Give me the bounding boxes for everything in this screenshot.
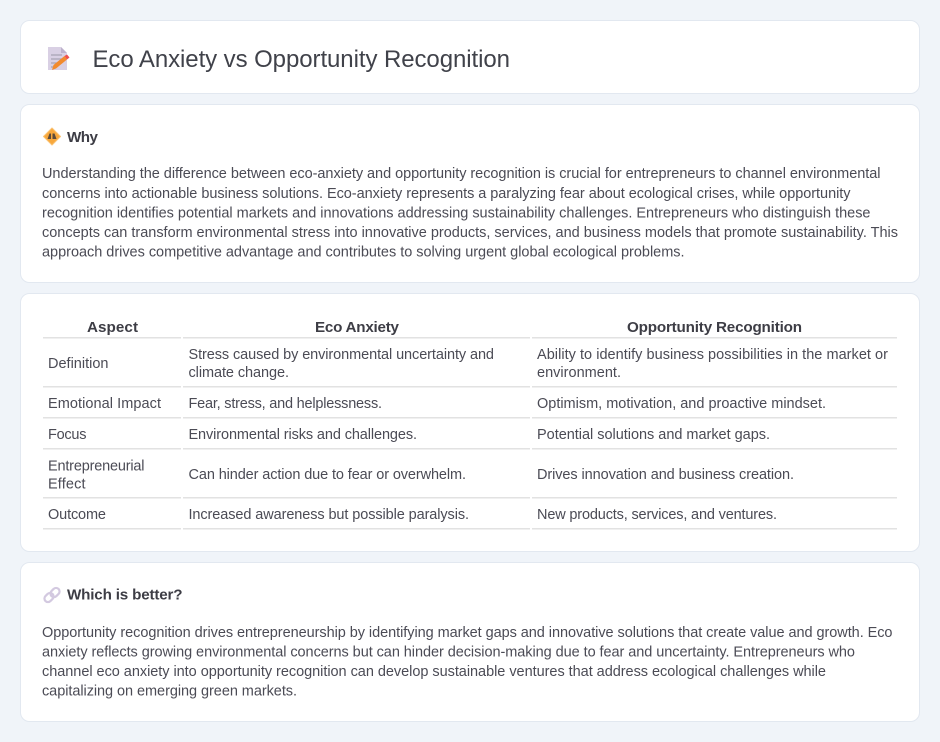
- row: outcome: Outcome: [48, 507, 106, 523]
- row: definition: Definition: [48, 356, 108, 372]
- row: definition: [48, 347, 888, 381]
- row: definition: Stress caused by environmental uncertainty and: [188, 347, 494, 363]
- row: emotional impact: Optimism, motivation, and proactive mindset.: [537, 396, 826, 412]
- row: emotional impact: Fear, stress, and helplessness.: [188, 396, 382, 412]
- row: emotional impact: Emotional Impact: [48, 396, 161, 412]
- panel: why: [20, 104, 920, 282]
- text block: why paragraph: recognition identifies potential markets and innovations addressing sustainability challenges. Entrepreneurs who distinguish these: [42, 206, 870, 222]
- text block: why paragraph: concerns into actionable business solutions. Eco-anxiety represents a paralyzing fear about ecological crises, while opportunity: [42, 186, 851, 202]
- text block: which is better paragraph: channel eco anxiety into opportunity recognition can develop sustainable ventures that address ecological challenges while: [42, 664, 826, 680]
- row: entrepreneurial effect: Can hinder action due to fear or overwhelm.: [188, 467, 466, 483]
- row: definition: Ability to identify business possibilities in the market or: [537, 347, 888, 363]
- table rules: [43, 337, 897, 530]
- panel: which is better: [20, 562, 920, 722]
- row: focus: Environmental risks and challenges.: [188, 427, 417, 443]
- icon: document with pencil: [48, 47, 70, 70]
- row: entrepreneurial effect: Entrepreneurial: [48, 458, 144, 474]
- text block: which is better paragraph: capitalizing on emerging green markets.: [42, 684, 297, 700]
- row: focus: Focus: [48, 427, 86, 443]
- title: Eco Anxiety vs Opportunity Recognition: [92, 46, 510, 73]
- row: focus: Potential solutions and market gaps.: [537, 427, 770, 443]
- text block: which is better paragraph: anxiety reflects growing environmental concerns but can hinder decision-making due to fear and uncertainty. Entrepreneurs who: [42, 644, 855, 660]
- row: focus: [48, 427, 770, 443]
- row: outcome: New products, services, and ventures.: [537, 507, 777, 523]
- table header: Opportunity Recognition: [627, 319, 802, 336]
- panel: title card: [20, 20, 920, 94]
- table header: Aspect: [87, 319, 138, 336]
- row: outcome: Increased awareness but possible paralysis.: [188, 507, 469, 523]
- heading: why: Why: [67, 129, 99, 146]
- table header: Eco Anxiety: [315, 319, 400, 336]
- icon: link: [43, 586, 61, 604]
- icon: warning diamond: [44, 128, 60, 145]
- row: entrepreneurial effect: Drives innovation and business creation.: [537, 467, 794, 483]
- row: definition: environment.: [537, 365, 621, 381]
- row: entrepreneurial effect: Effect: [48, 476, 86, 492]
- row: entrepreneurial effect: [48, 458, 794, 492]
- panel: comparison table: [20, 294, 920, 552]
- row: definition: climate change.: [188, 365, 289, 381]
- text block: why paragraph: [42, 166, 898, 260]
- text block: why paragraph: approach drives competitive advantage and contributes to solving urgent global ecological problems.: [42, 244, 684, 260]
- text block: why paragraph: concepts can transform environmental stress into innovative products, services, and business models that promote sustainability. This: [42, 225, 898, 241]
- row: emotional impact: [48, 396, 826, 412]
- row: outcome: [48, 507, 777, 523]
- heading: which is better: Which is better?: [67, 586, 182, 604]
- text block: which is better paragraph: [42, 625, 892, 700]
- text block: which is better paragraph: Opportunity recognition drives entrepreneurship by identifying market gaps and innovative solutions that create value and growth. Eco: [42, 625, 892, 641]
- text block: why paragraph: Understanding the difference between eco-anxiety and opportunity recognition is crucial for entrepreneurs to channel environmental: [42, 166, 880, 182]
- table header: [87, 319, 802, 336]
